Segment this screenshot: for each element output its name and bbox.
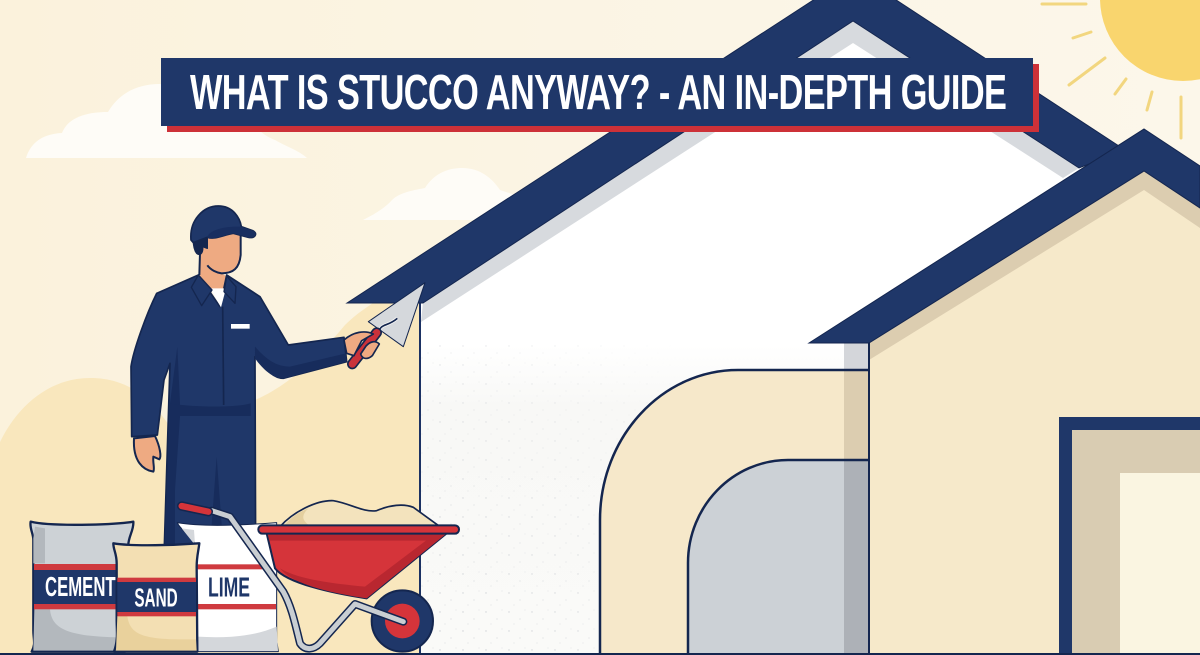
garage arch opening xyxy=(688,460,869,655)
sun with rays xyxy=(1042,0,1200,138)
wheel xyxy=(372,590,433,652)
cloud: small centre xyxy=(363,168,530,220)
ground line xyxy=(0,653,1200,655)
overalls shading xyxy=(164,347,347,557)
worker cap xyxy=(191,206,256,243)
wall shade strip xyxy=(844,343,869,654)
main roof xyxy=(347,0,1125,303)
cement bag xyxy=(30,522,133,652)
second house wall xyxy=(869,171,1200,655)
sand bag xyxy=(113,543,199,652)
tray xyxy=(258,525,459,598)
sand label: SAND xyxy=(134,582,178,612)
title banner xyxy=(161,58,1039,132)
materials: bags and wheelbarrow xyxy=(30,501,459,652)
frame tube xyxy=(212,511,403,649)
cloud: large left xyxy=(26,84,307,158)
lime bag xyxy=(177,523,278,652)
worker neck and face xyxy=(199,227,241,290)
lower hand xyxy=(134,436,160,472)
name badge xyxy=(231,324,250,329)
title text: WHAT IS STUCCO ANYWAY? - AN IN-DEPTH GUIDE xyxy=(190,65,1007,119)
wheelbarrow xyxy=(182,501,459,652)
sand coloured hills xyxy=(0,275,421,655)
second house wall edge line xyxy=(868,343,870,655)
door frame xyxy=(1059,417,1200,655)
worker figure xyxy=(131,206,425,557)
worker hair and jaw line xyxy=(193,233,241,275)
stucco texture on wall xyxy=(421,345,670,651)
second house roof xyxy=(809,129,1200,343)
main house wall xyxy=(420,21,1100,655)
cement label: CEMENT xyxy=(45,571,116,602)
wall left edge line xyxy=(419,303,421,655)
arch wall section xyxy=(600,370,869,655)
shirt and collar xyxy=(191,275,236,405)
lime label: LIME xyxy=(208,572,250,603)
raised hand xyxy=(344,332,379,358)
handle grip xyxy=(182,506,208,512)
second house roof shade xyxy=(869,171,1200,360)
load of sand xyxy=(280,501,440,527)
trowel xyxy=(352,283,425,364)
worker overalls xyxy=(131,275,347,557)
main roof shadow strip xyxy=(421,21,1079,322)
